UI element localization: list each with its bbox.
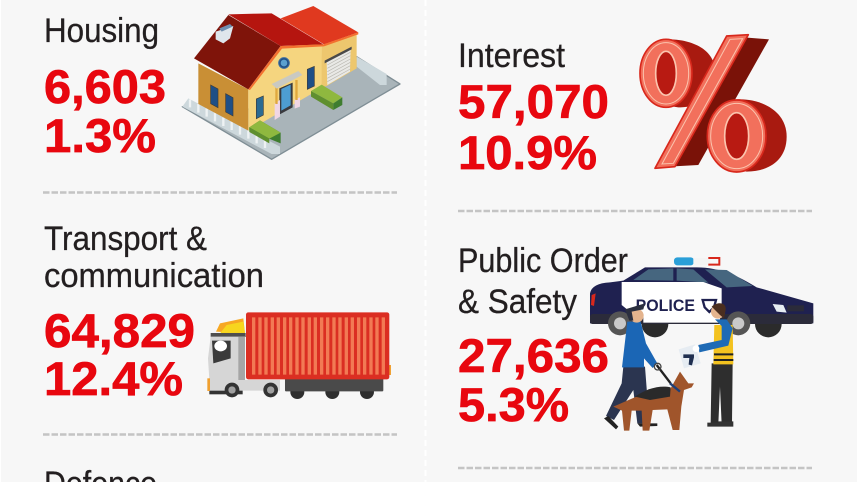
heading: public order and safety xyxy=(458,242,628,321)
icon: police officer with dog xyxy=(604,303,694,431)
icon: police car: POLICE xyxy=(636,296,695,315)
panel: interest xyxy=(458,35,787,179)
value: housing amount: 6,603 xyxy=(44,60,166,113)
value: transport amount: 64,829 xyxy=(44,304,195,357)
panel: public order and safety xyxy=(458,242,813,431)
icon: officer holding evidence xyxy=(679,303,733,427)
icon: police car xyxy=(590,257,813,337)
panel: housing xyxy=(44,6,400,162)
heading: public order and safety: & Safety xyxy=(458,283,577,321)
heading: transport and communication: communication xyxy=(44,257,264,295)
icon: percent sign xyxy=(640,35,787,172)
icon: house xyxy=(182,6,400,159)
panel: transport and communication xyxy=(44,220,391,405)
heading: housing: Housing xyxy=(44,12,159,50)
value: public order amount: 27,636 xyxy=(458,329,609,382)
value: transport share: 12.4% xyxy=(44,352,183,405)
value: interest amount: 57,070 xyxy=(458,75,609,128)
icon: truck xyxy=(207,312,391,399)
heading: public order and safety: Public Order xyxy=(458,242,628,280)
heading: transport and communication xyxy=(44,220,264,295)
value: public order share: 5.3% xyxy=(458,378,569,431)
value: interest share: 10.9% xyxy=(458,126,597,179)
value: housing share: 1.3% xyxy=(44,109,156,162)
heading: transport and communication: Transport & xyxy=(44,220,207,258)
heading: interest: Interest xyxy=(458,37,566,75)
